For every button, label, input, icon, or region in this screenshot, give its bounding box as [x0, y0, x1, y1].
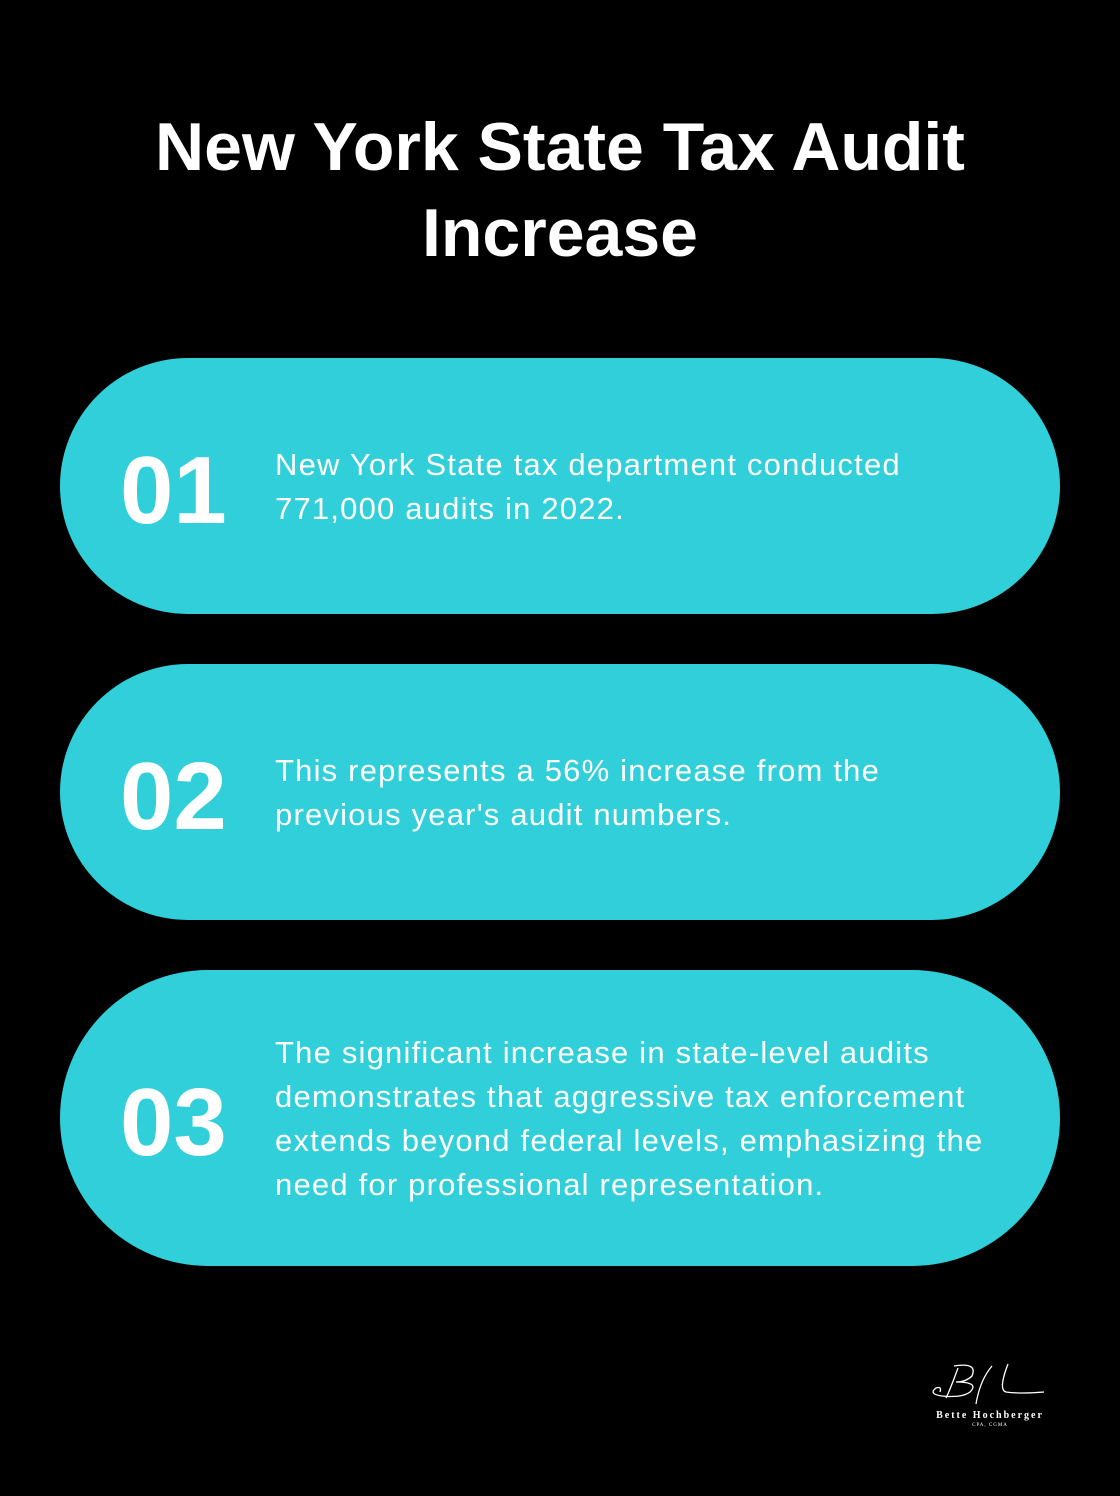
- text 01: [275, 447, 901, 526]
- text 03: demonstrates that aggressive tax enforcement: [275, 1079, 965, 1114]
- text 03: [275, 1035, 983, 1202]
- panel: step 03: [60, 970, 1060, 1266]
- panel: step 01: [60, 358, 1060, 614]
- text 03: need for professional representation.: [275, 1167, 824, 1202]
- text 01: 771,000 audits in 2022.: [275, 491, 625, 526]
- text 03: The significant increase in state-level audits: [275, 1035, 930, 1070]
- number 03: 03: [120, 1069, 227, 1176]
- panel: step 02: [60, 664, 1060, 920]
- text 02: This represents a 56% increase from the: [275, 753, 880, 788]
- number 02: 02: [120, 743, 227, 850]
- text 03: extends beyond federal levels, emphasizing the: [275, 1123, 983, 1158]
- text 02: previous year's audit numbers.: [275, 797, 732, 832]
- text 01: New York State tax department conducted: [275, 447, 901, 482]
- text 02: [275, 753, 880, 832]
- logo: CPA, CGMA: [972, 1423, 1008, 1428]
- title: New York State Tax Audit: [155, 109, 965, 185]
- logo: [932, 1364, 1044, 1428]
- title: [155, 109, 965, 271]
- icon: signature: [932, 1364, 1044, 1404]
- logo text: Bette Hochberger: [936, 1410, 1044, 1421]
- title: Increase: [422, 195, 698, 271]
- number 01: 01: [120, 437, 227, 544]
